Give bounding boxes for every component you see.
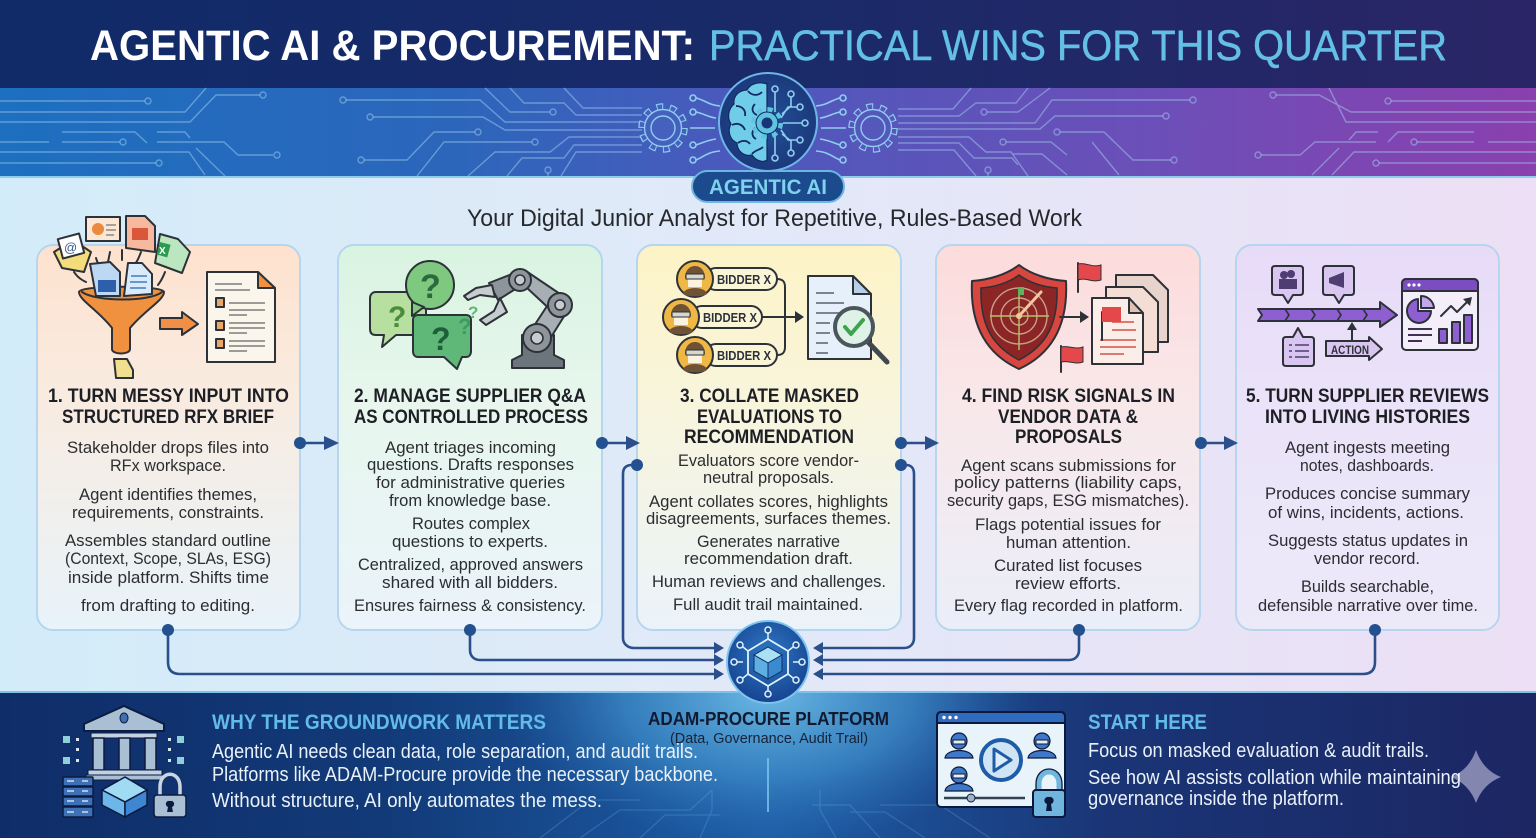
text block: Stakeholder drops files into: [67, 438, 269, 457]
platform label: (Data, Governance, Audit Trail): [670, 730, 868, 747]
text block: Every flag recorded in platform.: [954, 596, 1183, 615]
subtitle: Your Digital Junior Analyst for Repetitive, Rules-Based Work: [467, 205, 1083, 232]
main background: [0, 178, 1536, 692]
title: PRACTICAL WINS FOR THIS QUARTER: [709, 22, 1447, 70]
text block: [65, 438, 271, 615]
text block: Agent ingests meeting: [1285, 438, 1450, 457]
text block: from drafting to editing.: [81, 596, 255, 615]
text block: vendor record.: [1314, 549, 1420, 568]
circuit band: [0, 88, 1536, 178]
heading: [1246, 386, 1489, 428]
text block: shared with all bidders.: [382, 573, 558, 592]
text block: Evaluators score vendor-: [678, 451, 859, 470]
icon: question bubbles and robot arm: ?: [468, 303, 478, 322]
text block: (Context, Scope, SLAs, ESG): [65, 549, 271, 568]
icon: platform hub: [727, 621, 809, 703]
heading: [962, 386, 1175, 448]
panel: step 4 risk signals: [936, 245, 1200, 630]
text block: [1258, 438, 1478, 615]
text block: Produces concise summary: [1265, 484, 1470, 503]
icon: question bubbles and robot arm: ?: [388, 301, 406, 334]
text block: start here: governance inside the platform.: [1088, 788, 1344, 810]
title: [90, 22, 1447, 70]
heading: RECOMMENDATION: [684, 427, 854, 448]
icon: timeline and dashboard: [1258, 266, 1478, 366]
icon: right gear: [852, 107, 894, 149]
text block: why the groundwork matters: WHY THE GROUNDWORK MATTERS: [212, 710, 546, 734]
text block: neutral proposals.: [703, 468, 834, 487]
heading: [48, 386, 289, 428]
icon: question bubbles and robot arm: [370, 261, 572, 369]
text block: Flags potential issues for: [975, 515, 1161, 534]
text block: disagreements, surfaces themes.: [646, 509, 891, 528]
badge: Agentic AI: [692, 171, 844, 202]
text block: Agent scans submissions for: [961, 456, 1176, 475]
text block: why the groundwork matters: [212, 710, 718, 812]
text block: why the groundwork matters: Without structure, AI only automates the mess.: [212, 790, 602, 812]
icon: sparkle watermark: [1451, 750, 1501, 803]
text block: Centralized, approved answers: [358, 555, 583, 574]
text block: start here: Focus on masked evaluation & audit trails.: [1088, 740, 1429, 762]
text block: [646, 451, 891, 614]
title: AGENTIC AI & PROCUREMENT:: [90, 22, 695, 70]
heading: 5. TURN SUPPLIER REVIEWS: [1246, 386, 1489, 407]
icon: bank with server, cube and lock: [63, 706, 186, 817]
text block: Full audit trail maintained.: [673, 595, 863, 614]
text block: policy patterns (liability caps,: [954, 473, 1182, 492]
text block: requirements, constraints.: [72, 503, 264, 522]
panel: step 3 masked evaluations: [637, 245, 901, 630]
panel: step 1 messy input: [37, 216, 300, 630]
platform label: ADAM-PROCURE PLATFORM: [648, 708, 889, 729]
text block: start here: See how AI assists collation while maintaining: [1088, 767, 1461, 789]
text block: why the groundwork matters: Platforms like ADAM-Procure provide the necessary backbone.: [212, 764, 718, 786]
text block: why the groundwork matters: Agentic AI needs clean data, role separation, and audit trails.: [212, 741, 698, 763]
platform label: [648, 708, 889, 747]
text block: Ensures fairness & consistency.: [354, 596, 586, 615]
heading: PROPOSALS: [1015, 427, 1122, 448]
badge: Agentic AI: AGENTIC AI: [709, 175, 827, 199]
text block: Agent triages incoming: [385, 438, 556, 457]
heading: [354, 386, 588, 428]
text block: questions. Drafts responses: [367, 455, 574, 474]
icon: funnel with files to outline: @: [64, 240, 77, 255]
text block: Builds searchable,: [1301, 577, 1434, 596]
heading: 3. COLLATE MASKED: [680, 386, 859, 407]
panel: step 2 supplier Q&A: [338, 245, 602, 630]
text block: Agent collates scores, highlights: [649, 492, 888, 511]
icon: question bubbles and robot arm: ?: [431, 321, 451, 357]
text block: defensible narrative over time.: [1258, 596, 1478, 615]
heading: [680, 386, 859, 448]
text block: human attention.: [1006, 533, 1131, 552]
heading: VENDOR DATA &: [998, 407, 1138, 428]
text block: Generates narrative: [697, 532, 840, 551]
text block: of wins, incidents, actions.: [1268, 503, 1464, 522]
heading: AS CONTROLLED PROCESS: [354, 407, 588, 428]
heading: EVALUATIONS TO: [697, 407, 842, 428]
text block: notes, dashboards.: [1300, 456, 1434, 475]
text block: inside platform. Shifts time: [68, 568, 269, 587]
icon: question bubbles and robot arm: ?: [420, 268, 441, 306]
icon: brain circuit emblem: [690, 73, 846, 171]
text block: [947, 456, 1189, 615]
text block: from knowledge base.: [389, 491, 551, 510]
arrows between steps: [294, 436, 1238, 450]
text block: review efforts.: [1015, 574, 1121, 593]
text block: start here: [1088, 710, 1461, 810]
text block: RFx workspace.: [110, 456, 226, 475]
icon: video window with masked bidders and lock: [937, 712, 1065, 817]
text block: for administrative queries: [376, 473, 565, 492]
heading: 4. FIND RISK SIGNALS IN: [962, 386, 1175, 407]
heading: STRUCTURED RFX BRIEF: [62, 407, 274, 428]
text block: Human reviews and challenges.: [652, 572, 886, 591]
icon: funnel with files to outline: X: [159, 246, 166, 257]
text block: Suggests status updates in: [1268, 531, 1468, 550]
icon: radar shield and flagged documents: [972, 263, 1168, 372]
heading: INTO LIVING HISTORIES: [1265, 407, 1470, 428]
heading: 2. MANAGE SUPPLIER Q&A: [354, 386, 586, 407]
text block: Agent identifies themes,: [79, 485, 257, 504]
icon: masked bidders feeding document: BIDDER X: [717, 349, 772, 363]
text block: [354, 438, 586, 615]
text block: security gaps, ESG mismatches).: [947, 491, 1189, 510]
icon: left gear: [642, 107, 684, 149]
icon: timeline and dashboard: ACTION: [1331, 345, 1369, 357]
header bar: [0, 0, 1536, 88]
panel: step 5 supplier reviews: [1236, 245, 1499, 630]
text block: recommendation draft.: [684, 549, 853, 568]
text block: questions to experts.: [392, 532, 548, 551]
icon: masked bidders feeding document: [663, 261, 887, 373]
arrows into platform: [162, 459, 1381, 680]
icon: masked bidders feeding document: BIDDER X: [717, 273, 772, 287]
icon: funnel with files to outline: [54, 216, 275, 378]
icon: masked bidders feeding document: BIDDER X: [703, 311, 758, 325]
text block: Routes complex: [412, 514, 530, 533]
icon: question bubbles and robot arm: ?: [458, 314, 471, 339]
text block: Assembles standard outline: [65, 531, 271, 550]
text block: start here: START HERE: [1088, 710, 1207, 734]
footer background: [0, 691, 1536, 838]
heading: 1. TURN MESSY INPUT INTO: [48, 386, 289, 407]
text block: Curated list focuses: [994, 556, 1142, 575]
